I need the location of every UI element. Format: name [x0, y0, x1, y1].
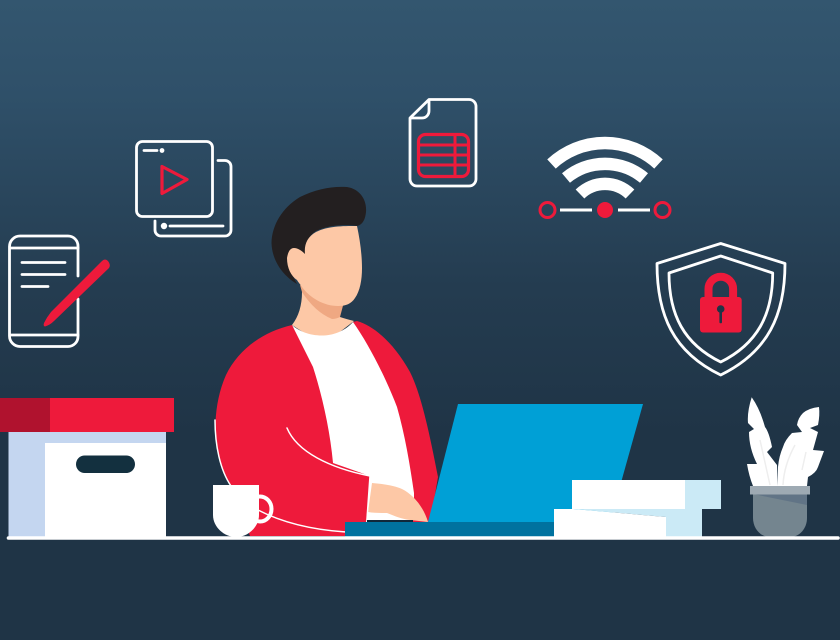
pot body [753, 494, 807, 537]
laptop base [345, 522, 560, 537]
hand [368, 483, 428, 522]
person [215, 187, 438, 536]
box lid [0, 398, 174, 432]
box handle [76, 456, 135, 473]
storage box [0, 398, 174, 537]
keyboard edge [367, 520, 413, 522]
box front [45, 443, 166, 537]
face [287, 226, 362, 306]
jacket fold lines [215, 420, 370, 533]
icon: spreadsheet document [410, 100, 476, 186]
icon: wifi network [540, 143, 670, 218]
icon: security shield [657, 244, 785, 375]
box lid shade [0, 398, 50, 432]
coffee mug [213, 485, 272, 537]
t-shirt [292, 322, 414, 520]
potted plant [747, 397, 824, 537]
laptop screen [428, 404, 643, 522]
left leaf [747, 397, 778, 486]
box side [8, 432, 166, 537]
upper book cover [572, 480, 685, 509]
jacket front and sleeve [215, 325, 370, 536]
neck [292, 285, 354, 345]
laptop [345, 404, 643, 537]
leaf shading [760, 440, 806, 485]
hair [272, 187, 366, 284]
icon: video player [136, 142, 231, 236]
stack of books [554, 480, 721, 537]
desk line [8, 536, 838, 540]
pot rim [750, 486, 810, 494]
icon: phone with pen [10, 236, 110, 346]
jacket right strip [353, 321, 438, 524]
neck shadow [300, 285, 345, 319]
lower book pages [573, 509, 702, 537]
upper book pages [685, 480, 721, 509]
lower book cover [554, 509, 666, 537]
pot shadow [753, 494, 807, 505]
right leaf [778, 407, 824, 486]
